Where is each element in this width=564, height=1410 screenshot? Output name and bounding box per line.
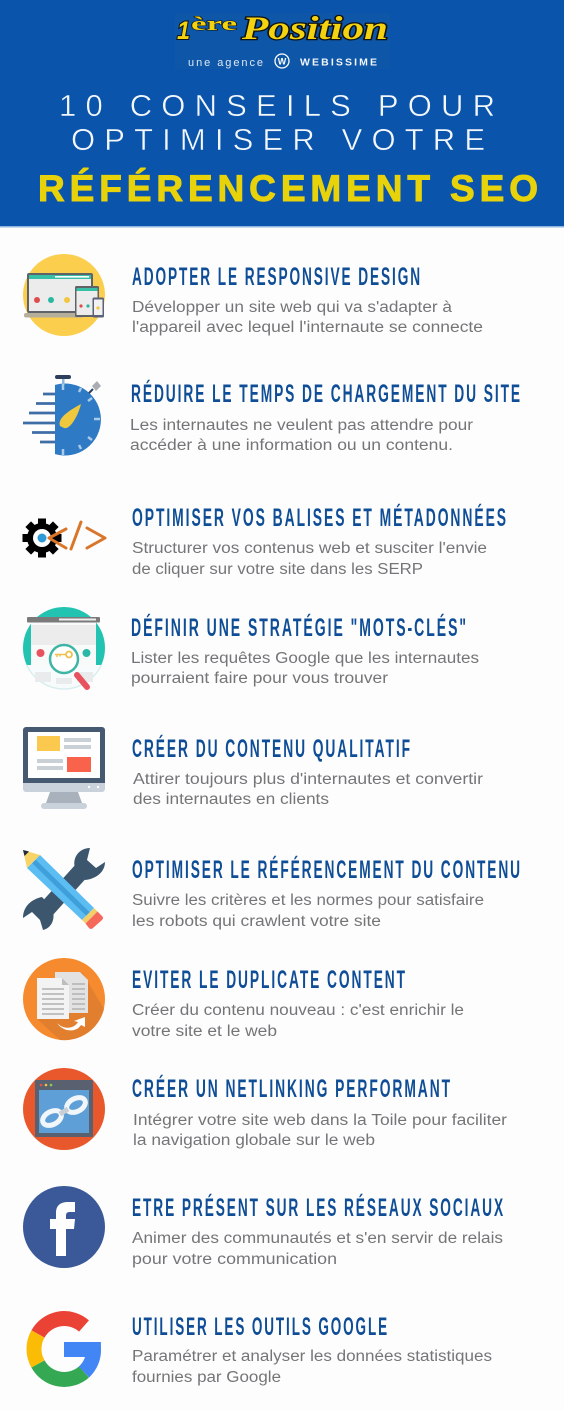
description: fournies par Google [132, 1369, 281, 1386]
description: des internautes en clients [133, 791, 329, 808]
description: Suivre les critères et les normes pour satisfaire [132, 892, 484, 909]
description: l'appareil avec lequel l'internaute se connecte [132, 319, 483, 336]
icon: duplicate documents [23, 958, 105, 1040]
description: de cliquer sur votre site dans les SERP [132, 561, 423, 578]
title line 2: OPTIMISER VOTRE [71, 122, 485, 157]
logo: 1ère Position: 1 [177, 17, 190, 45]
icon: chain link window [23, 1068, 105, 1150]
logo: 1ère Position [175, 11, 390, 69]
logo: 1ère Position: Position [241, 11, 388, 47]
item 9: réseaux sociaux [23, 1186, 505, 1268]
icon: monitor [23, 727, 105, 809]
description: Lister les requêtes Google que les internautes [131, 650, 479, 667]
icon: facebook [23, 1186, 105, 1268]
item 6: référencement du contenu [23, 848, 522, 930]
description [132, 1230, 503, 1268]
description: pour votre communication [132, 1251, 337, 1268]
description: Créer du contenu nouveau : c'est enrichir le [132, 1002, 464, 1019]
icon: keyword search [23, 607, 105, 689]
description: votre site et le web [132, 1023, 277, 1040]
icon: wrench and pencil [23, 848, 105, 930]
logo: 1ère Position: W [278, 56, 287, 66]
logo: 1ère Position: WEBISSIME [300, 56, 377, 68]
item 8: netlinking [23, 1068, 507, 1150]
title line 1: 10 CONSEILS POUR [59, 88, 495, 123]
icon: stopwatch [23, 375, 101, 456]
logo: 1ère Position: ère [191, 14, 237, 35]
description [130, 417, 473, 454]
item 10: outils google [34, 1313, 492, 1386]
icon: google G [34, 1319, 94, 1379]
logo: 1ère Position: une agence [188, 57, 265, 69]
description [132, 1002, 464, 1040]
description [132, 299, 483, 336]
description [133, 1112, 507, 1149]
description: les robots qui crawlent votre site [132, 913, 381, 930]
description: Développer un site web qui va s'adapter à [132, 299, 452, 316]
icon: gear and code [22, 518, 105, 558]
description: Paramétrer et analyser les données statistiques [132, 1348, 492, 1365]
icon: responsive devices [23, 254, 105, 336]
item 2: temps de chargement [23, 375, 522, 456]
description [132, 540, 487, 578]
description: Structurer vos contenus web et susciter l'envie [132, 540, 487, 557]
item 3: balises [22, 503, 508, 578]
item 7: duplicate content [23, 958, 464, 1040]
description [131, 650, 479, 687]
description: Les internautes ne veulent pas attendre pour [130, 417, 473, 434]
title line 3: RÉFÉRENCEMENT SEO [38, 168, 538, 209]
description: Animer des communautés et s'en servir de relais [132, 1230, 503, 1247]
panel: header [0, 0, 564, 228]
description: pourraient faire pour vous trouver [131, 670, 388, 687]
description [132, 892, 484, 930]
description: Intégrer votre site web dans la Toile pour faciliter [133, 1112, 507, 1129]
description [132, 1348, 492, 1386]
item 4: mots-clés [23, 607, 479, 689]
description: accéder à une information ou un contenu. [130, 437, 453, 454]
description: Attirer toujours plus d'internautes et convertir [133, 771, 483, 788]
description: la navigation globale sur le web [133, 1132, 375, 1149]
description [133, 771, 483, 808]
item 5: contenu qualitatif [23, 727, 483, 809]
item 1: responsive design [23, 254, 483, 336]
